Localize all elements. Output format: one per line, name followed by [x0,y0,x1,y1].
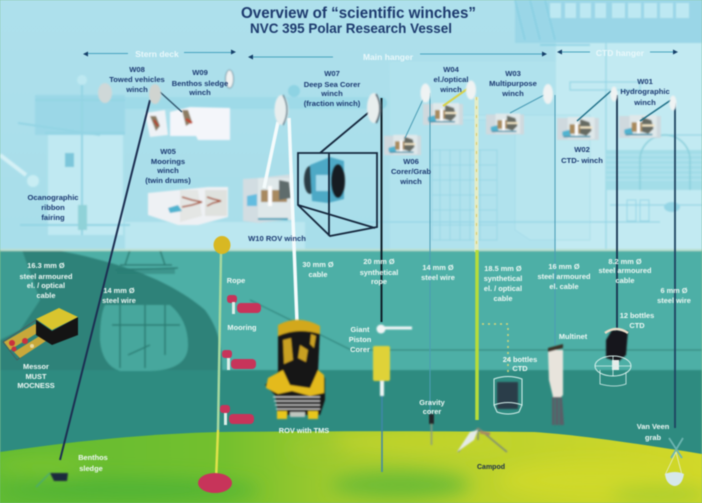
seawater labels: steel wire [657,296,691,305]
seawater labels: CTD [512,364,528,373]
winch labels: Corer/Grab [391,167,431,176]
seawater labels: MOCNESS [17,381,55,390]
winch labels [27,65,670,243]
mooring anchor disc [198,473,232,493]
winch: W08 and W09 boxes [145,107,230,140]
seawater labels: ROV with TMS [279,426,329,435]
winch labels: winch [320,89,343,98]
water column [0,250,702,460]
seawater labels: cable [494,294,512,303]
winch labels: W09 [192,68,208,77]
seawater labels: 14 mm Ø [103,286,135,295]
seawater labels: Messor [23,362,49,371]
seawater labels: Campod [477,464,505,471]
background: sky and ship area [0,0,702,250]
24 bottles CTD [482,324,522,414]
seawater labels: Corer [350,345,370,354]
section: CTD hangar header [557,48,678,58]
seawater labels: steel armoured [598,266,652,275]
winch: W07 deep sea corer cube [298,108,377,236]
seawater labels: steel armoured [538,272,591,281]
winch labels: ribbon [41,203,65,212]
winch labels: (fraction winch) [304,99,361,108]
winch labels: W10 ROV winch [248,234,306,243]
mooring units [220,295,261,425]
campod tripod [457,428,507,452]
small winches W06 W04 W03 W02 W01 [384,103,661,155]
seawater labels: 14 mm Ø [422,263,454,272]
benthos sledge [36,473,68,487]
seawater labels: Rope [227,276,245,285]
giant piston corer [373,324,412,396]
seawater labels: corer [423,407,441,416]
winch labels: W01 [637,77,654,86]
seawater labels: steel wire [421,273,455,282]
seawater labels: 30 mm Ø [302,260,334,269]
seawater labels: Multinet [559,332,588,341]
winch labels: W08 [129,65,145,74]
winch labels: W05 [160,147,177,156]
mooring float [214,236,230,254]
seawater labels: steel armoured [20,272,73,281]
seawater labels: 12 bottles [620,311,654,320]
winch labels: winch [125,85,148,94]
seawater labels: Piston [349,335,372,344]
12 bottles CTD [595,329,631,386]
winch labels: W07 [324,69,340,78]
Van Veen grab [665,438,684,486]
seawater labels: 16 mm Ø [548,262,580,271]
title: NVC 395 Polar Research Vessel [250,20,452,36]
ship line art [0,0,702,250]
winch labels: W03 [505,69,521,78]
winch labels: Towed vehicles [109,75,165,84]
seawater labels: Gravity [419,398,446,407]
seawater labels: grab [645,433,661,442]
seawater labels: el. / optical [27,281,65,290]
section: stern deck header [83,49,236,59]
cables [60,87,675,480]
winch labels: winch [633,98,656,107]
seawater labels: synthetical [484,274,522,283]
seawater labels: cable [37,291,55,300]
seawater labels: 8.2 mm Ø [608,257,642,266]
section: main hangar header [248,52,547,62]
seawater labels: synthetical [360,268,398,277]
seawater labels: cable [309,270,327,279]
seawater labels: el. cable [549,282,579,291]
seawater labels: 20 mm Ø [363,257,395,266]
section: main hangar header: Main hanger [363,52,414,62]
winch labels: winch [439,85,462,94]
seawater labels: CTD [629,321,645,330]
seawater labels: sledge [79,464,103,473]
seawater labels: Van Veen [637,422,670,431]
winch labels: winch [188,88,211,97]
multinet [548,344,564,426]
seawater labels: cable [616,276,634,285]
winch labels: Benthos sledge [172,79,228,88]
pulleys [98,70,676,125]
seabed [0,425,702,503]
winch labels: Ocanographic [27,193,79,202]
winch: W05 moorings twin drums [148,187,228,225]
winch labels: (twin drums) [145,176,191,185]
winch labels: winch [399,177,422,186]
seawater labels: Giant [351,325,370,334]
winch labels: winch [156,166,179,175]
winch labels: CTD- winch [561,156,603,165]
winch labels: fairing [41,213,65,222]
section: CTD hangar header: CTD hanger [596,48,645,58]
title [241,5,476,36]
winch labels: winch [501,89,524,98]
winch labels: W02 [574,145,590,154]
seawater labels: el. / optical [484,284,522,293]
winch labels: Multipurpose [489,79,537,88]
seawater labels: Mooring [227,323,257,332]
title: Overview of “scientific winches” [241,5,476,22]
seawater labels: steel wire [102,296,136,305]
ROV with TMS [265,320,325,419]
winch labels: W06 [403,157,419,166]
winch: W10 ROV [243,174,293,223]
seawater labels [17,257,691,473]
seawater labels: 16.3 mm Ø [27,261,65,270]
Messor MUST MOCNESS instrument [3,308,78,360]
winch labels: Deep Sea Corer [304,80,360,89]
gravity corer [429,414,434,445]
seawater labels: 18.5 mm Ø [484,264,522,273]
winch labels: Moorings [151,157,185,166]
section: stern deck header: Stern deck [135,49,179,59]
winch labels: W04 [443,65,460,74]
seawater labels: 24 bottles [503,355,537,364]
seawater labels: rope [371,277,387,286]
seawater labels: Benthos [78,453,108,462]
seawater labels: MUST [26,372,47,381]
seawater labels: 6 mm Ø [660,286,688,295]
winch labels: el./optical [433,75,469,84]
winch labels: Hydrographic [620,87,670,96]
